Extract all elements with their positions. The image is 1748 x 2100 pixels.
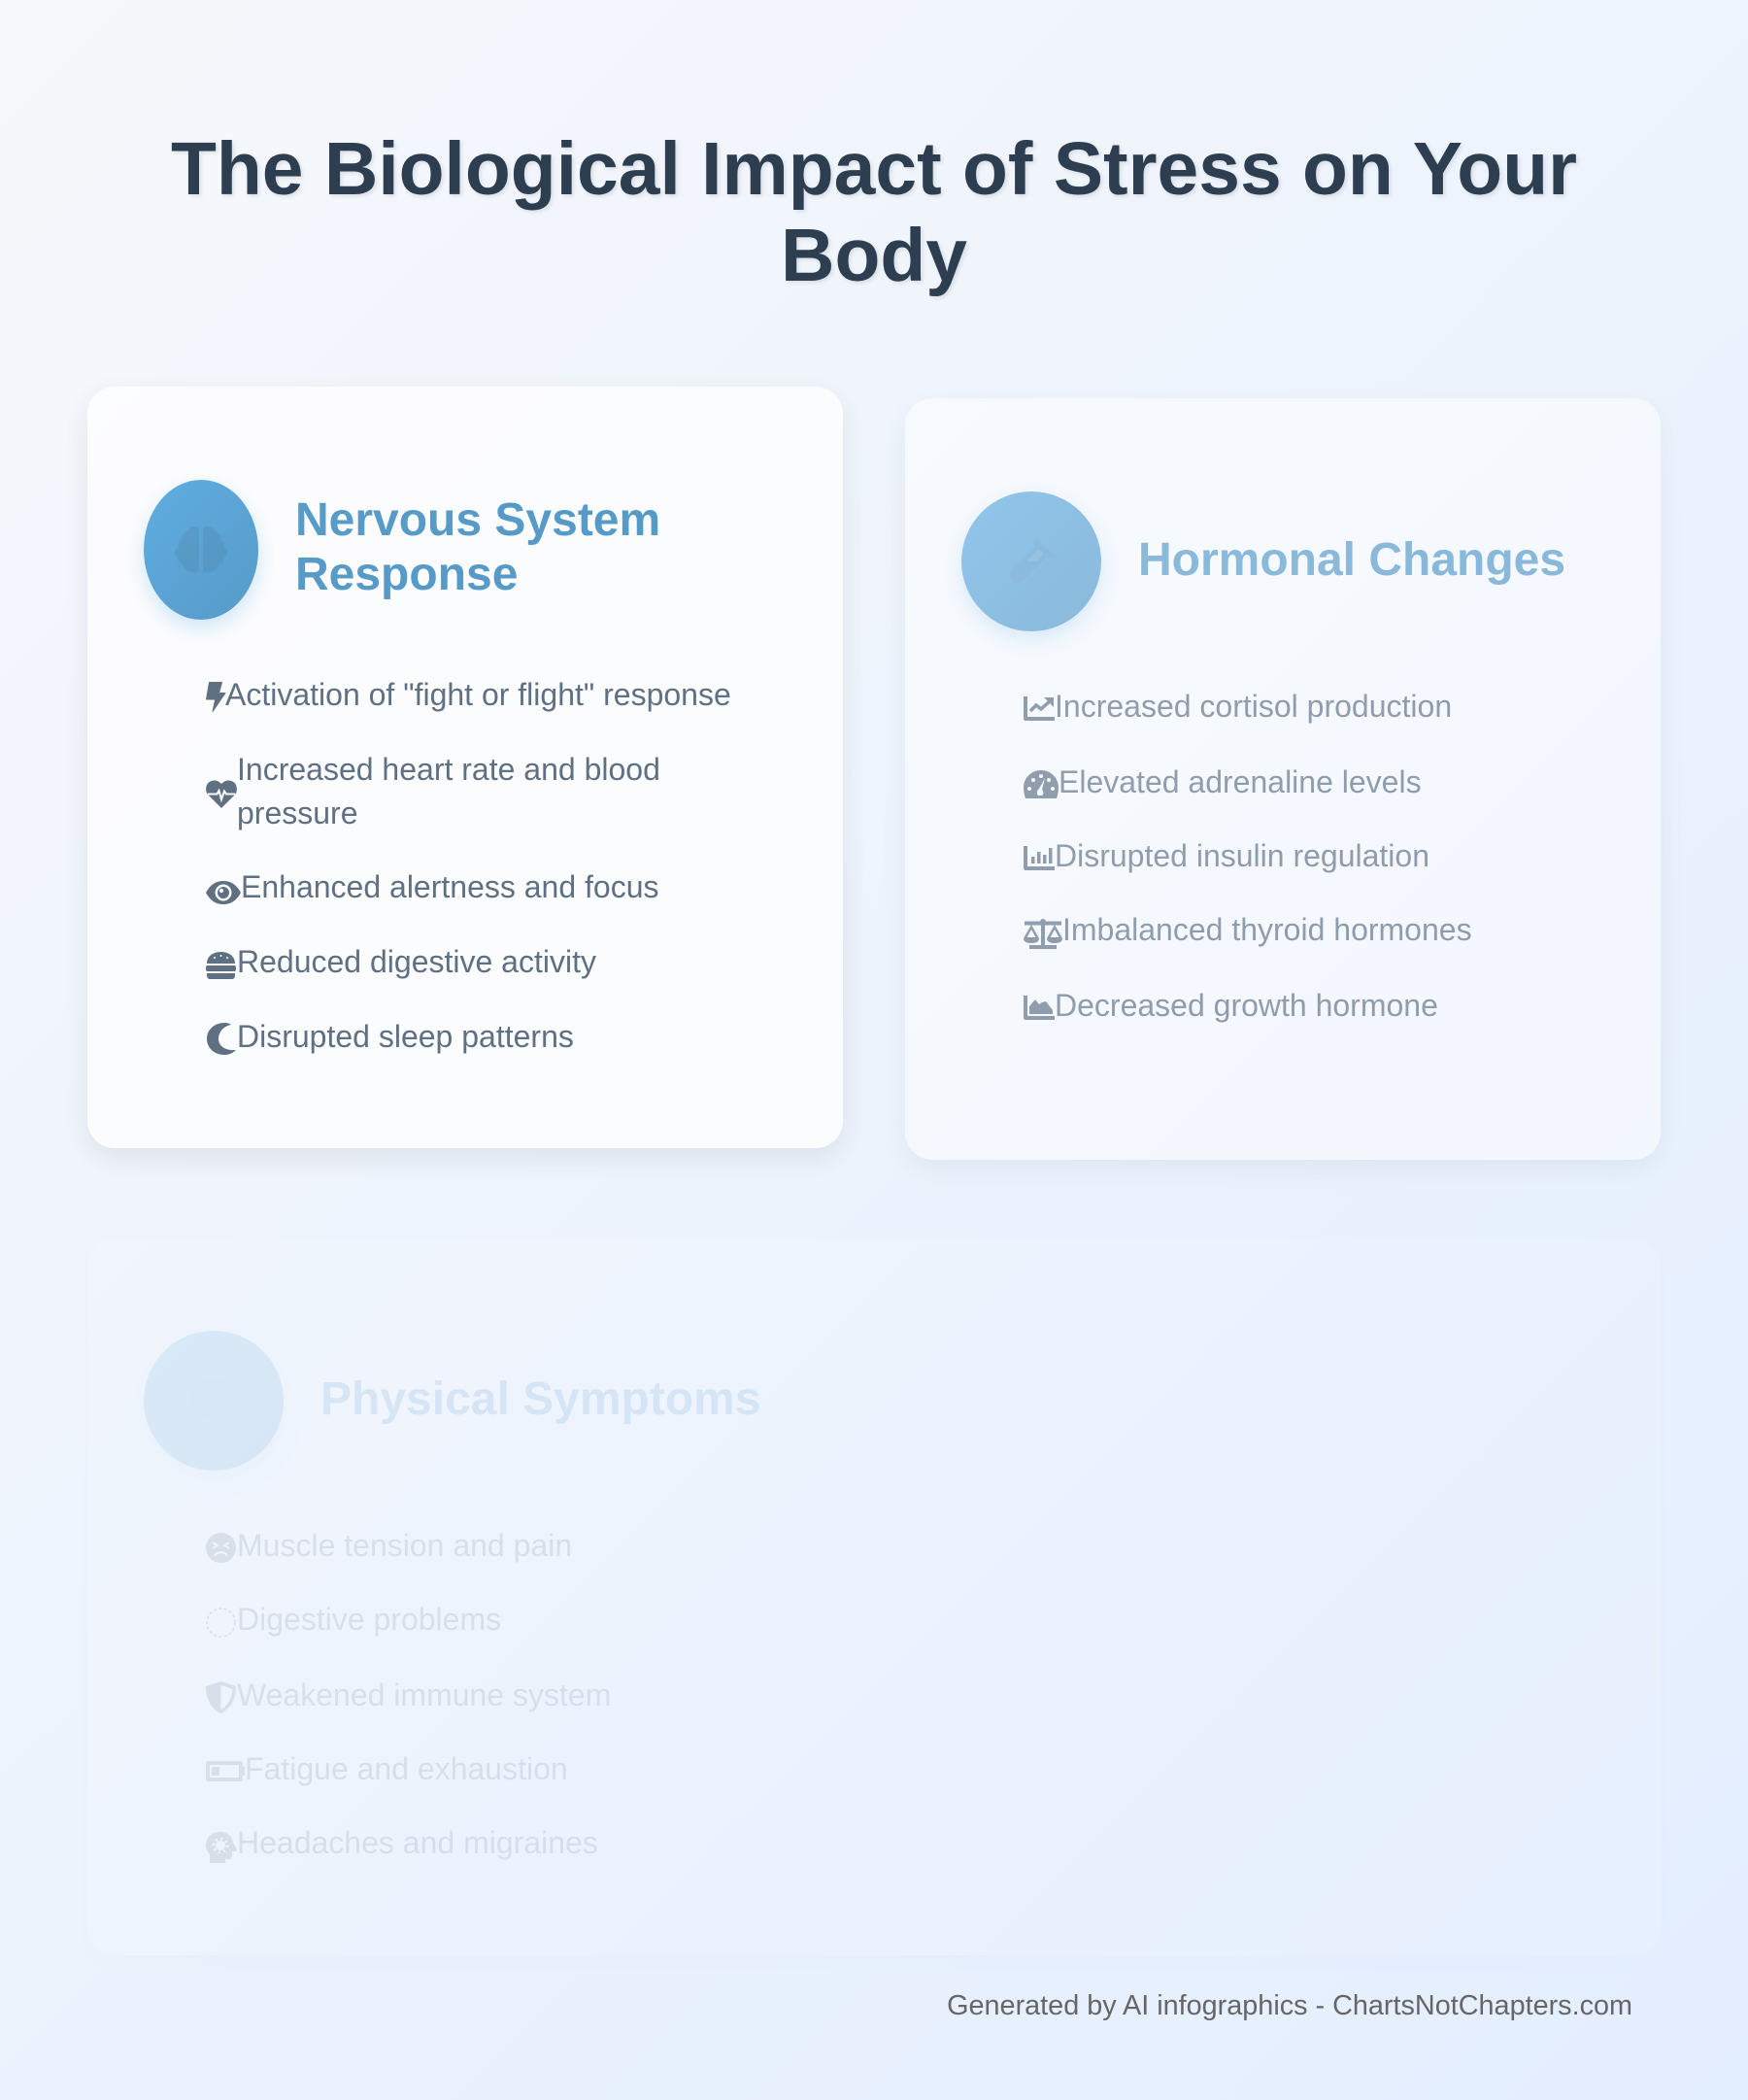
panel: nervous system response: Increased heart rate and blood [237, 752, 660, 787]
panel: hormonal changes: Increased cortisol production [1055, 689, 1452, 724]
icon: person [144, 1331, 284, 1471]
list item: headaches [206, 1825, 598, 1863]
heading: nervous system response: Response [295, 549, 518, 600]
panel: hormonal changes: Disrupted insulin regulation [1055, 838, 1429, 873]
footer credit: Generated by AI infographics - ChartsNotChapters.com [947, 1990, 1632, 2021]
list item: immune system [206, 1677, 611, 1713]
panel: hormonal changes: Imbalanced thyroid hormones [1062, 912, 1472, 947]
panel: nervous system response: Activation of "fight or flight" response [225, 677, 731, 712]
panel: nervous system response: pressure [237, 796, 357, 830]
panel: hormonal changes: Decreased growth hormone [1055, 988, 1438, 1023]
list item: alertness [206, 869, 659, 904]
list item: adrenaline [1024, 764, 1422, 799]
list item: fatigue [206, 1751, 568, 1786]
title [171, 127, 1579, 299]
panel: nervous system response: Reduced digestive activity [237, 944, 596, 979]
panel: physical symptoms: Digestive problems [237, 1602, 501, 1637]
panel: physical symptoms: Headaches and migraines [237, 1825, 598, 1860]
title: The Biological Impact of Stress on Your [171, 127, 1577, 211]
list item: heart rate [206, 752, 660, 830]
list item: activation [206, 677, 731, 712]
list item: digestive activity [206, 944, 596, 979]
panel: physical symptoms: Muscle tension and pain [237, 1528, 572, 1563]
list item: thyroid [1024, 912, 1472, 949]
list item: muscle tension [206, 1528, 572, 1563]
list item: growth hormone [1024, 988, 1438, 1023]
panel: hormonal changes [905, 398, 1661, 1160]
heading: nervous system response [295, 494, 660, 600]
panel: physical symptoms: Fatigue and exhaustion [245, 1751, 568, 1786]
heading: nervous system response: Nervous System [295, 494, 660, 546]
title: Body [781, 214, 967, 297]
panel: physical symptoms: Weakened immune system [237, 1677, 611, 1712]
panel: hormonal changes: Elevated adrenaline levels [1059, 764, 1422, 799]
panel: physical symptoms [87, 1238, 1661, 1955]
list item: insulin [1024, 838, 1429, 873]
list item: digestive problems [206, 1602, 501, 1638]
panel: nervous system response [87, 387, 843, 1148]
list item: cortisol [1024, 689, 1452, 724]
icon: brain [144, 480, 258, 620]
heading: physical symptoms: Physical Symptoms [320, 1373, 761, 1424]
list item: sleep [207, 1019, 574, 1055]
heading: hormonal changes: Hormonal Changes [1138, 534, 1565, 586]
panel: nervous system response: Disrupted sleep patterns [237, 1019, 574, 1054]
icon: test tube [961, 491, 1101, 631]
panel: nervous system response: Enhanced alertness and focus [241, 869, 659, 904]
